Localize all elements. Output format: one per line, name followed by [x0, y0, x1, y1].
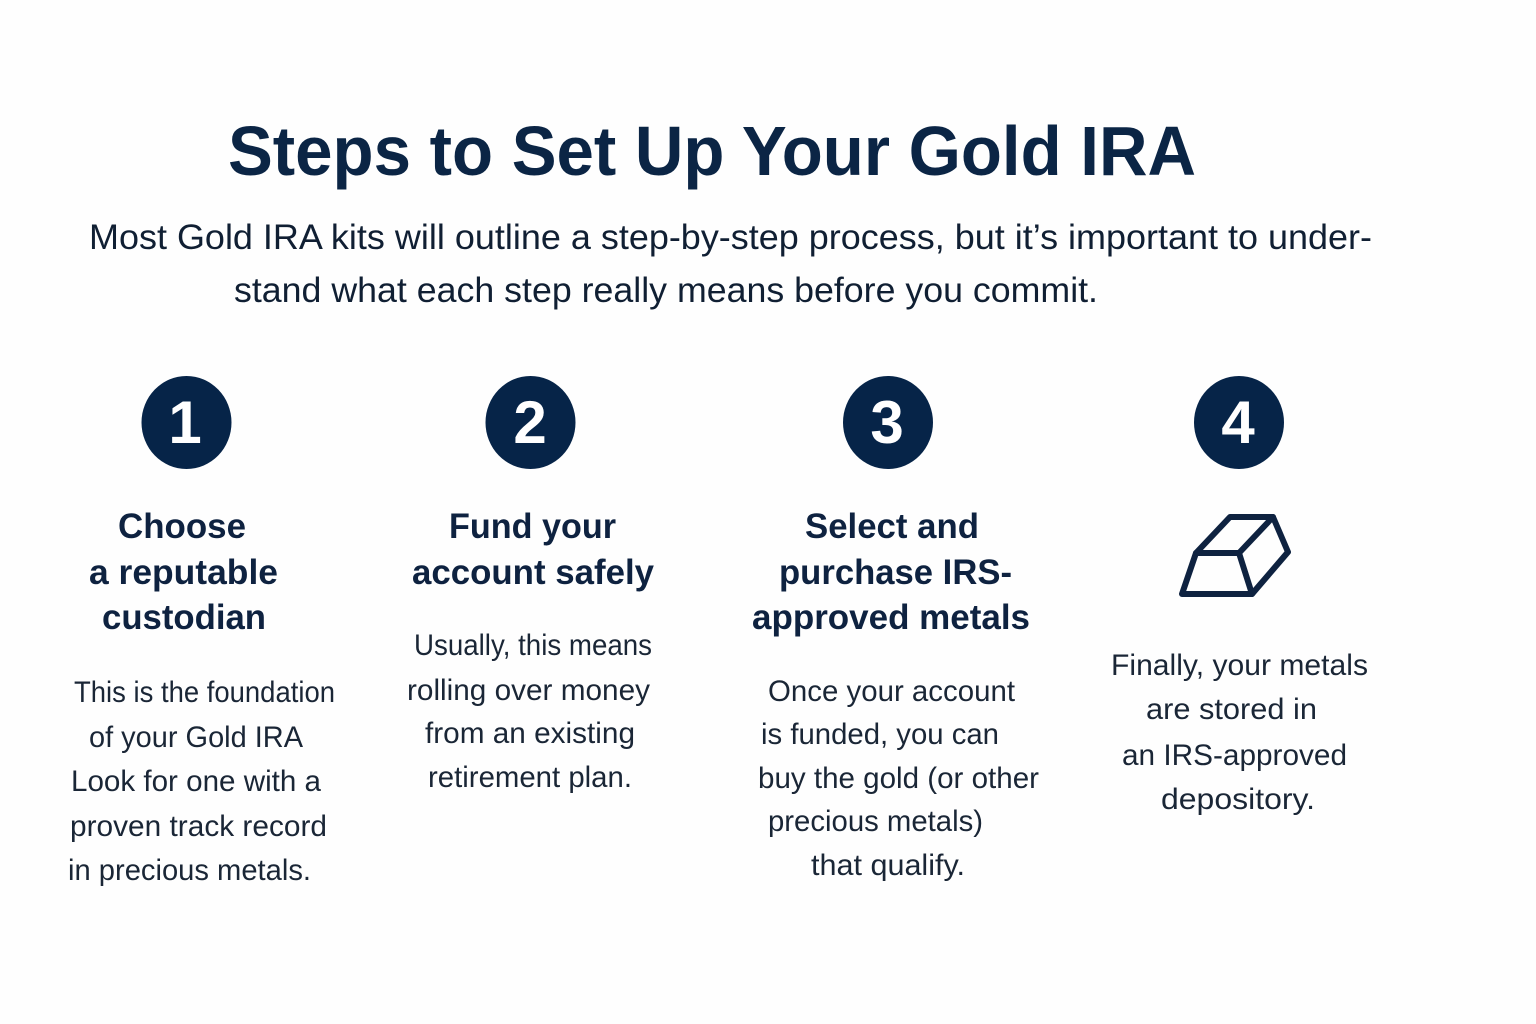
- heading: step 3: Select and: [805, 507, 979, 546]
- number badge 1: 1: [168, 389, 202, 456]
- heading: step 2: [412, 507, 655, 592]
- text: step 1 description: This is the foundation: [74, 676, 335, 709]
- intro paragraph: stand what each step really means before you commit.: [234, 271, 1098, 310]
- text: step 4 description: [1111, 649, 1368, 816]
- text: step 2 description: from an existing: [425, 717, 635, 750]
- panel: step 3: [752, 376, 1039, 882]
- text: step 3 description: that qualify.: [811, 849, 965, 882]
- text: step 2 description: Usually, this means: [414, 629, 652, 662]
- number badge 1: [142, 376, 232, 469]
- heading: step 1: a reputable: [89, 553, 278, 592]
- text: step 4 description: depository.: [1161, 783, 1315, 816]
- icon: gold bar: [1182, 517, 1288, 594]
- text: step 4 description: Finally, your metals: [1111, 649, 1368, 682]
- text: step 2 description: retirement plan.: [428, 761, 632, 794]
- text: step 2 description: [407, 629, 652, 794]
- intro paragraph: [89, 218, 1372, 310]
- intro paragraph: Most Gold IRA kits will outline a step-by-step process, but it’s important to under-: [89, 218, 1372, 257]
- panel: step 2: [407, 376, 655, 794]
- heading: step 3: purchase IRS-: [779, 553, 1012, 592]
- text: step 3 description: Once your account: [768, 675, 1016, 708]
- heading: step 3: approved metals: [752, 598, 1030, 637]
- number badge 4: 4: [1221, 389, 1255, 456]
- text: step 3 description: [758, 675, 1039, 882]
- text: step 3 description: is funded, you can: [761, 718, 999, 751]
- number badge 3: [843, 376, 933, 469]
- text: step 1 description: Look for one with a: [71, 765, 321, 798]
- text: step 1 description: [68, 676, 335, 887]
- panel: step 4: [1111, 376, 1368, 816]
- text: step 1 description: of your Gold IRA: [89, 721, 303, 754]
- number badge 2: 2: [513, 389, 547, 456]
- text: step 2 description: rolling over money: [407, 674, 650, 707]
- text: step 4 description: are stored in: [1146, 693, 1317, 726]
- text: step 3 description: precious metals): [768, 805, 983, 838]
- heading: step 1: custodian: [102, 598, 266, 637]
- heading: step 2: Fund your: [449, 507, 616, 546]
- text: step 3 description: buy the gold (or other: [758, 762, 1039, 795]
- number badge 4: [1194, 376, 1284, 469]
- text: step 1 description: proven track record: [70, 810, 327, 843]
- title: Steps to Set Up Your Gold IRA: [228, 112, 1196, 190]
- heading: step 3: [752, 507, 1030, 637]
- text: step 1 description: in precious metals.: [68, 854, 311, 887]
- heading: step 1: [89, 507, 278, 637]
- heading: step 2: account safely: [412, 553, 655, 592]
- number badge 2: [486, 376, 576, 469]
- panel: step 1: [68, 376, 335, 887]
- heading: step 1: Choose: [118, 507, 246, 546]
- number badge 3: 3: [870, 389, 904, 456]
- text: step 4 description: an IRS-approved: [1122, 739, 1347, 772]
